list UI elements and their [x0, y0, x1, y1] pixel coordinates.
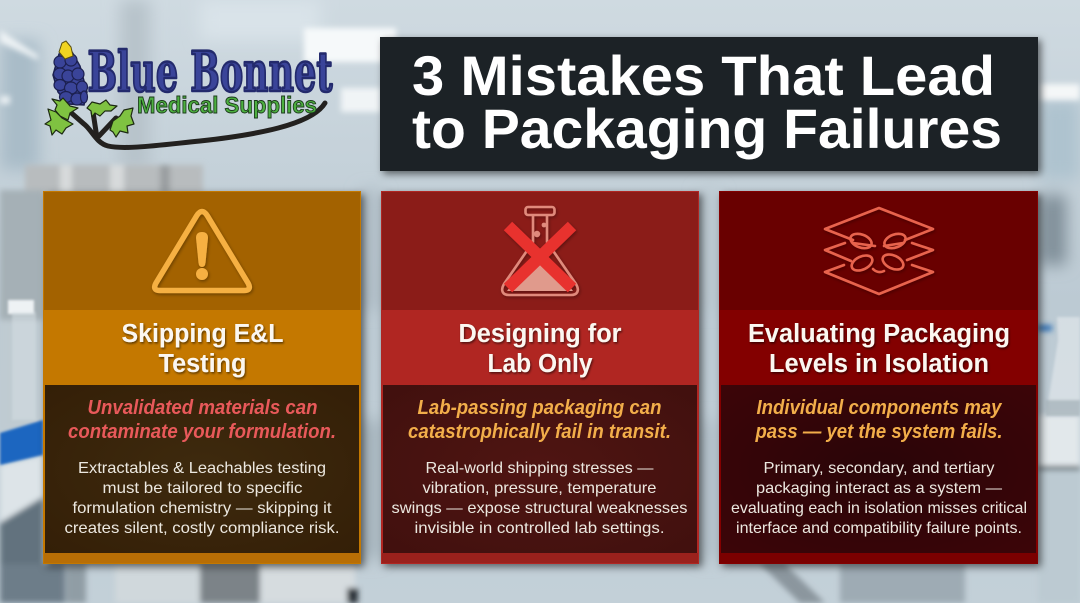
- panel 1 callout: Unvalidated materials can: [88, 397, 318, 419]
- logo: Blue Bonnet Medical Supplies: [45, 39, 333, 147]
- panel 2 description: vibration, pressure, temperature: [422, 480, 657, 497]
- logo tagline: Medical Supplies: [137, 92, 317, 118]
- panel 1 body: [45, 385, 359, 553]
- panel 3 heading: Levels in Isolation: [769, 350, 989, 378]
- title panel: [380, 37, 1038, 171]
- panel 2 description: invisible in controlled lab settings.: [414, 520, 664, 537]
- panel 2 heading: Lab Only: [488, 350, 593, 378]
- panel: evaluating packaging levels in isolation: [719, 191, 1038, 564]
- panel 3 description: evaluating each in isolation misses critical: [731, 500, 1027, 517]
- logo flower: [53, 52, 88, 105]
- panel 1 footer: [44, 553, 360, 563]
- panel 3 heading: [748, 320, 1010, 378]
- logo wordmark: Blue Bonnet: [88, 39, 333, 104]
- logo flower tip: [59, 41, 73, 59]
- panel 3 callout: [755, 397, 1002, 443]
- panel 2 body: [383, 385, 697, 553]
- panel 1 description: creates silent, costly compliance risk.: [64, 520, 340, 537]
- logo stem: [68, 103, 325, 147]
- panel 2 callout: Lab-passing packaging can: [418, 397, 662, 419]
- panel 3 footer: [720, 553, 1037, 563]
- panel: designing for lab only: [381, 191, 699, 564]
- title line 1: 3 Mistakes That Lead: [412, 44, 995, 107]
- panel 2 callout: [408, 397, 671, 443]
- icon: flask crossed out: [502, 207, 578, 295]
- panel 3 description: Primary, secondary, and tertiary: [764, 460, 995, 477]
- panel 3 icon area: [720, 192, 1037, 310]
- panel 2 icon area: [382, 192, 698, 310]
- panel: skipping E&L testing: [43, 191, 361, 564]
- panel 1 description: must be tailored to specific: [102, 480, 303, 497]
- panel 1 heading: Skipping E&L: [122, 320, 284, 348]
- panel 1 callout: [68, 397, 336, 443]
- panel 1 description: Extractables & Leachables testing: [78, 460, 326, 477]
- panel 3 description: [731, 460, 1027, 537]
- panel 1 icon area: [44, 192, 360, 310]
- title line 2: to Packaging Failures: [412, 97, 1002, 160]
- panel 1 heading: Testing: [158, 350, 246, 378]
- panel 2 description: swings — expose structural weaknesses: [392, 500, 688, 517]
- panel 2 heading: Designing for: [458, 320, 622, 348]
- icon: warning triangle: [155, 212, 249, 290]
- panel 3 description: packaging interact as a system —: [756, 480, 1002, 497]
- logo leaves: [45, 98, 134, 137]
- panel 2 description: Real-world shipping stresses —: [426, 460, 654, 477]
- panel 2 description: [392, 460, 688, 537]
- icon: linked packaging layers: [825, 208, 933, 294]
- panel 1 description: [64, 460, 340, 537]
- panel 1 description: formulation chemistry — skipping it: [72, 500, 332, 517]
- panel 2 heading: [458, 320, 622, 378]
- panel 3 description: interface and compatibility failure points.: [736, 520, 1022, 537]
- panel 3 heading: Evaluating Packaging: [748, 320, 1010, 348]
- panel 3 callout: Individual components may: [756, 397, 1002, 419]
- panel 1 heading: [122, 320, 284, 378]
- panel 2 footer: [382, 553, 698, 563]
- panel 3 callout: pass — yet the system fails.: [755, 421, 1002, 443]
- panel 3 body: [721, 385, 1036, 553]
- panel 2 callout: catastrophically fail in transit.: [408, 421, 671, 443]
- panel 1 callout: contaminate your formulation.: [68, 421, 336, 443]
